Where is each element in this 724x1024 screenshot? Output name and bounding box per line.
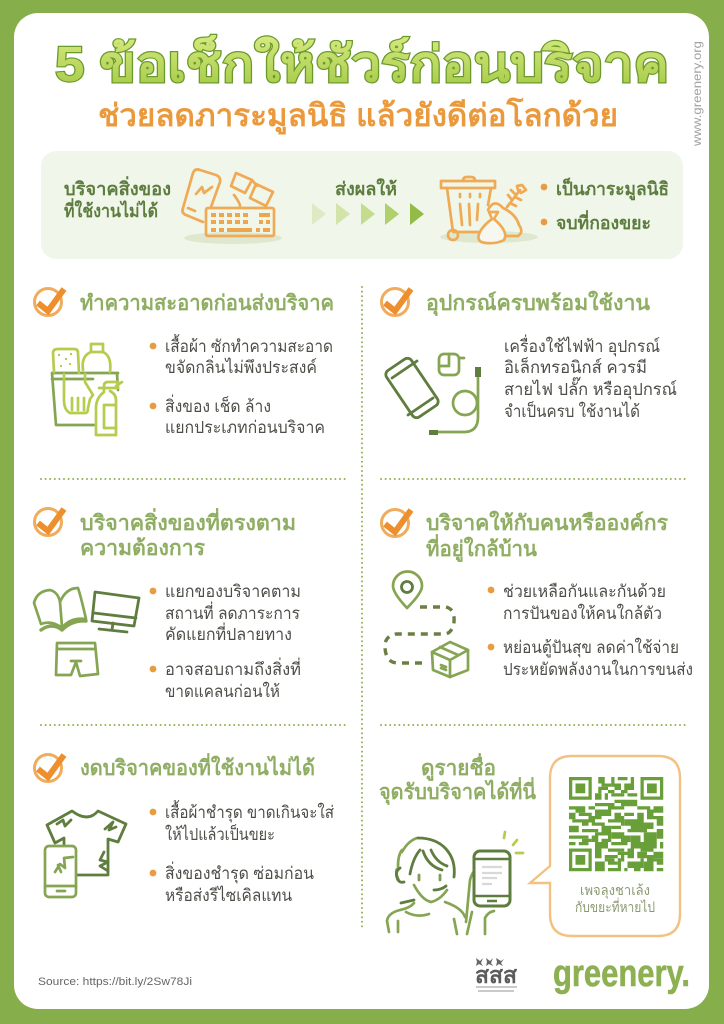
- cause text: บริจาคสิ่งของ: [64, 176, 171, 199]
- bullet list: [150, 334, 333, 437]
- icons: book, monitor, shorts: [34, 588, 139, 676]
- source note: Source: https://bit.ly/2Sw78Ji: [38, 976, 192, 988]
- icon: check: [34, 754, 64, 782]
- bullet list: ขาดแคลนก่อนให้: [165, 681, 280, 701]
- icon: broken phone, glasses and keyboard: [182, 169, 282, 244]
- panel: donate nearby: [382, 510, 693, 679]
- panel: do not donate broken items: [34, 752, 335, 905]
- heading: บริจาคสิ่งของที่ตรงตาม: [80, 507, 296, 535]
- icon: cleaning bucket: [52, 344, 122, 435]
- bullet list: หย่อนตู้ปันสุข ลดค่าใช้จ่าย: [503, 637, 679, 658]
- bullets: consequences: เป็นภาระมูลนิธิ: [556, 177, 669, 201]
- bullets: consequences: จบที่กองขยะ: [556, 210, 651, 233]
- bullet list: คัดแยกที่ปลายทาง: [165, 622, 292, 644]
- bullet list: ช่วยเหลือกันและกันด้วย: [503, 582, 666, 601]
- heading: งดบริจาคของที่ใช้งานไม่ได้: [80, 752, 315, 780]
- text: เครื่องใช้ไฟฟ้า อุปกรณ์: [504, 334, 660, 357]
- bullet list: สิ่งของ เช็ด ล้าง: [165, 394, 271, 416]
- icon: trash bin and bags: [440, 177, 538, 243]
- bullet list: หรือส่งรีไซเคิลแทน: [165, 885, 292, 905]
- bullets: consequences: [541, 177, 669, 233]
- text: [504, 334, 677, 421]
- bullet list: [150, 582, 301, 701]
- icon: torn shirt and broken phone: [45, 811, 126, 897]
- panel: donate what is needed: [34, 507, 301, 701]
- panel: complete equipment: [382, 288, 677, 435]
- result text: ส่งผลให้: [335, 178, 397, 199]
- cause text: ที่ใช้งานไม่ได้: [64, 198, 158, 221]
- heading: ทำความสะอาดก่อนส่งบริจาค: [80, 292, 334, 315]
- cause text: [64, 176, 171, 221]
- bullet list: [488, 582, 693, 679]
- heading: ความต้องการ: [80, 536, 206, 560]
- heading: [426, 510, 669, 563]
- icon: check: [34, 288, 64, 316]
- bullet list: เสื้อผ้า ซักทำความสะอาด: [165, 334, 333, 356]
- icon: map pin, route and box: [385, 572, 468, 677]
- website vertical label: www.greenery.org: [692, 41, 704, 147]
- heading: [379, 752, 537, 806]
- bullet list: เสื้อผ้าชำรุด ขาดเกินจะใส่: [165, 800, 335, 823]
- QR code: [569, 777, 663, 871]
- bullet list: แยกประเภทก่อนบริจาค: [165, 418, 325, 437]
- heading: ดูรายชื่อ: [421, 752, 496, 782]
- bullet list: อาจสอบถามถึงสิ่งที่: [165, 657, 301, 679]
- QR caption: [575, 882, 655, 915]
- bullet list: สิ่งของชำรุด ซ่อมก่อน: [165, 861, 314, 884]
- arrows: [312, 203, 424, 225]
- panel: clean before donating: [34, 288, 334, 437]
- heading: ที่อยู่ใกล้บ้าน: [426, 533, 538, 563]
- bullet list: แยกของบริจาคตาม: [165, 582, 301, 601]
- bullet list: ขจัดกลิ่นไม่พึงประสงค์: [165, 355, 317, 377]
- logo: thaihealth: สสส: [475, 962, 518, 988]
- QR caption: กับขยะที่หายไป: [575, 898, 655, 915]
- bullet list: สถานที่ ลดภาระการ: [165, 601, 300, 623]
- bullet list: การปันของให้คนใกล้ตัว: [503, 603, 662, 623]
- title: 5 ข้อเช็กให้ชัวร์ก่อนบริจาค: [55, 34, 669, 92]
- bullet list: [150, 800, 335, 905]
- icon: woman holding phone: [387, 832, 523, 934]
- text: อิเล็กทรอนิกส์ ควรมี: [504, 356, 647, 377]
- icon: phone, mouse, cable: [384, 354, 481, 435]
- icon: check: [382, 510, 411, 536]
- QR caption: เพจลุงชาเล้ง: [580, 882, 650, 899]
- heading: [80, 507, 296, 560]
- heading: บริจาคให้กับคนหรือองค์กร: [426, 510, 669, 535]
- subtitle: ช่วยลดภาระมูลนิธิ แล้วยังดีต่อโลกด้วย: [98, 97, 618, 135]
- text: จำเป็นครบ ใช้งานได้: [504, 400, 640, 421]
- logo: greenery: greenery.: [553, 953, 690, 995]
- panel: problem summary: [41, 151, 683, 259]
- text: สายไฟ ปลั๊ก หรืออุปกรณ์: [504, 376, 677, 400]
- bullet list: ประหยัดพลังงานในการขนส่ง: [503, 659, 693, 679]
- icon: check: [34, 508, 64, 536]
- speech bubble: [530, 756, 680, 936]
- panel: donation points QR: [379, 752, 680, 936]
- icon: check: [382, 288, 411, 316]
- bullet list: ให้ไปแล้วเป็นขยะ: [165, 823, 275, 844]
- heading: จุดรับบริจาคได้ที่นี่: [379, 776, 537, 806]
- heading: อุปกรณ์ครบพร้อมใช้งาน: [426, 290, 651, 317]
